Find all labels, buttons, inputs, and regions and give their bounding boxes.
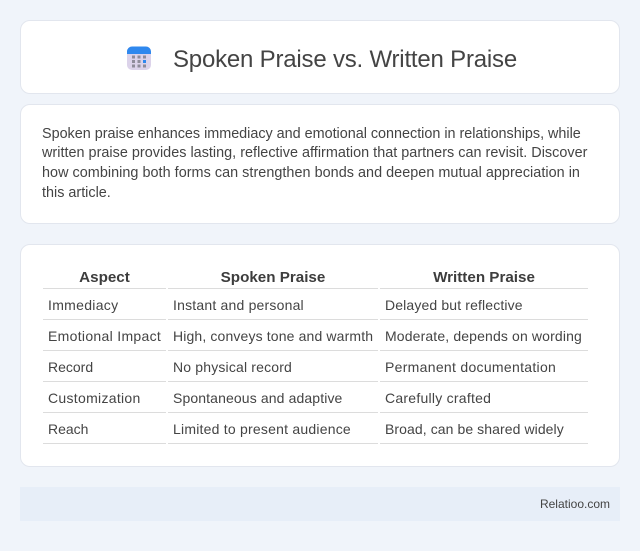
row: Emotional Impact: Moderate, depends on wording (385, 328, 582, 344)
icon: calendar (127, 46, 151, 70)
text block: introduction: written praise provides lasting, reflective affirmation that partners can revisit. Discover (42, 145, 587, 161)
footer bar (20, 487, 620, 521)
table header (43, 269, 588, 289)
text block: introduction: how combining both forms can strengthen bonds and deepen mutual appreciation in (42, 165, 580, 181)
row: Immediacy: Immediacy (48, 297, 118, 313)
table header: Spoken Praise (221, 269, 325, 286)
row: Reach: Reach (48, 421, 88, 437)
row: Emotional Impact: Emotional Impact (48, 328, 161, 344)
row: Record (43, 359, 588, 382)
text block: introduction: this article. (42, 185, 111, 201)
row: Record: Record (48, 359, 93, 375)
panel: introduction (20, 104, 620, 224)
row: Reach (43, 421, 588, 444)
table header: Written Praise (433, 269, 535, 286)
row: Customization: Spontaneous and adaptive (173, 390, 342, 406)
row: Reach: Limited to present audience (173, 421, 351, 437)
text block: introduction: Spoken praise enhances immediacy and emotional connection in relationships, while (42, 126, 581, 142)
text block: introduction (42, 126, 588, 201)
row: Customization: Carefully crafted (385, 390, 491, 406)
table header: Aspect (79, 269, 130, 286)
row: Emotional Impact (43, 328, 588, 351)
title: Spoken Praise vs. Written Praise (173, 46, 517, 73)
row: Emotional Impact: High, conveys tone and warmth (173, 328, 373, 344)
row: Customization: Customization (48, 390, 141, 406)
row: Record: Permanent documentation (385, 359, 556, 375)
panel: comparison table (20, 244, 620, 467)
row: Customization (43, 390, 588, 413)
row: Immediacy: Delayed but reflective (385, 297, 523, 313)
row: Reach: Broad, can be shared widely (385, 421, 564, 437)
row: Record: No physical record (173, 359, 292, 375)
footer credit: Relatioo.com (540, 497, 610, 511)
row: Immediacy (43, 297, 588, 320)
panel: title header (20, 20, 620, 94)
row: Immediacy: Instant and personal (173, 297, 304, 313)
